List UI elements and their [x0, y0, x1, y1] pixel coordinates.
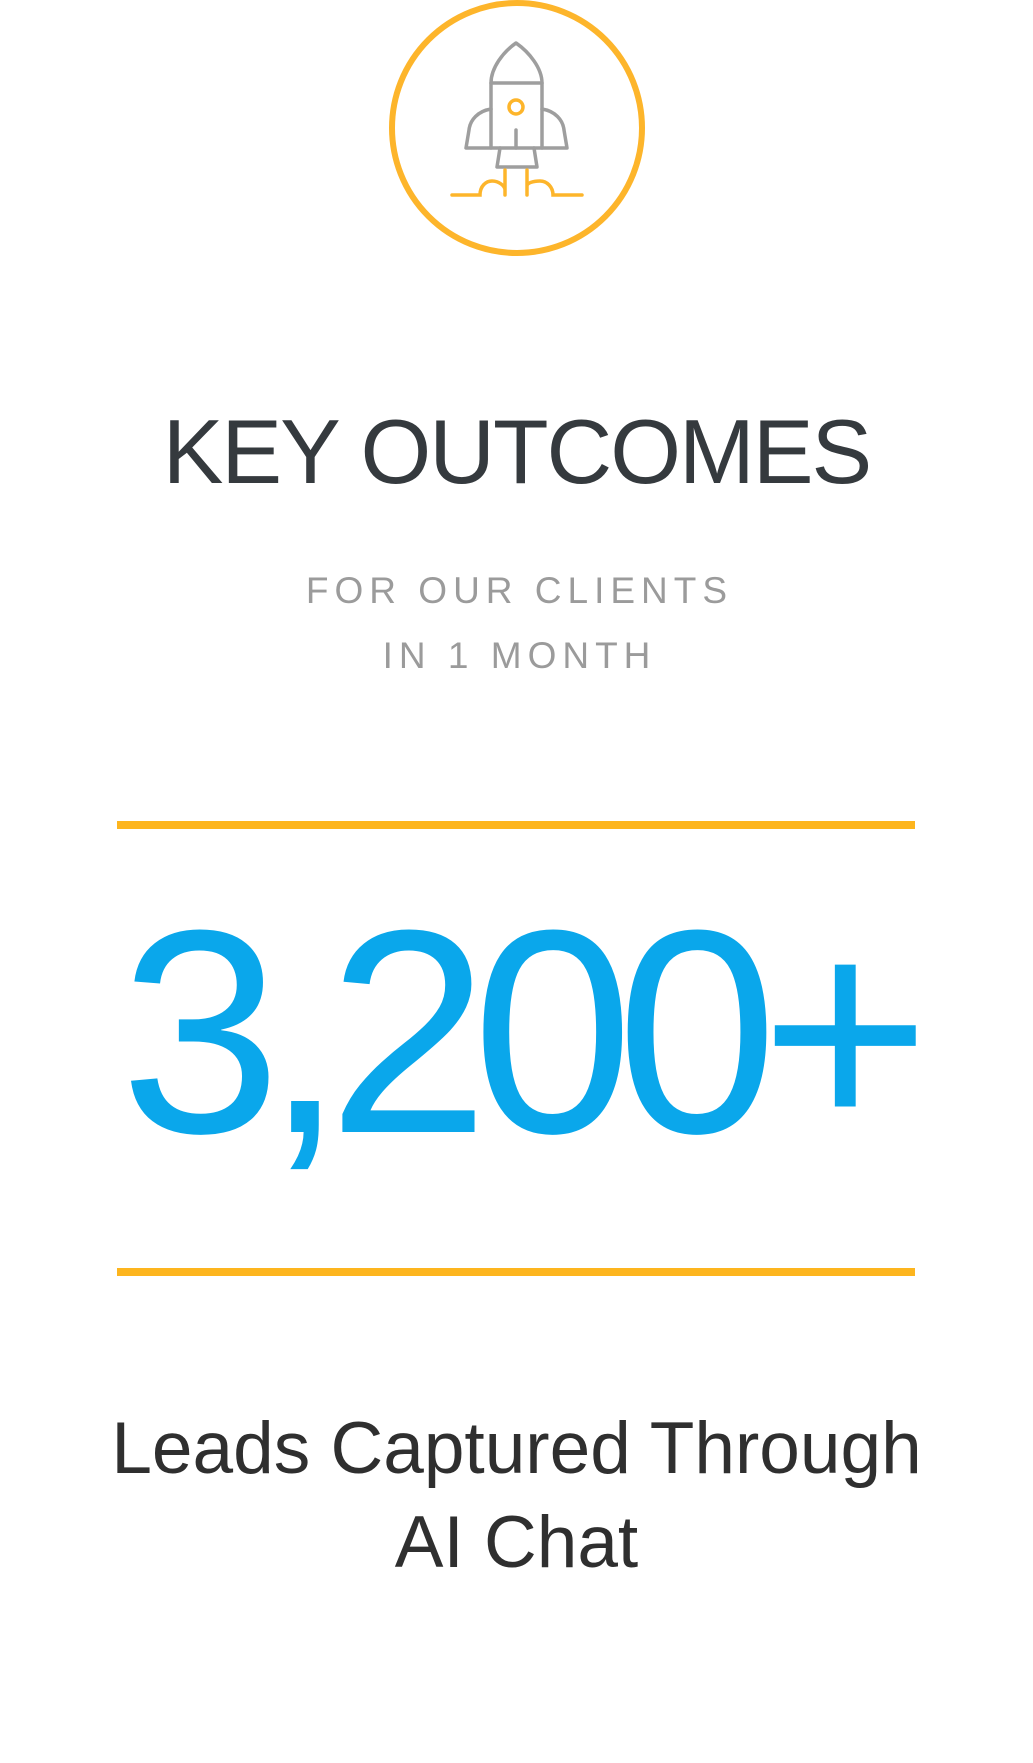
subtitle: IN 1 MONTH — [383, 635, 656, 676]
subtitle — [306, 570, 733, 676]
icon: rocket in circle — [389, 0, 645, 256]
caption — [111, 1408, 922, 1583]
caption: Leads Captured Through — [111, 1408, 922, 1489]
big number: 3,200+ — [120, 870, 913, 1194]
subtitle: FOR OUR CLIENTS — [306, 570, 733, 611]
caption: AI Chat — [395, 1502, 638, 1583]
title: KEY OUTCOMES — [163, 402, 870, 503]
